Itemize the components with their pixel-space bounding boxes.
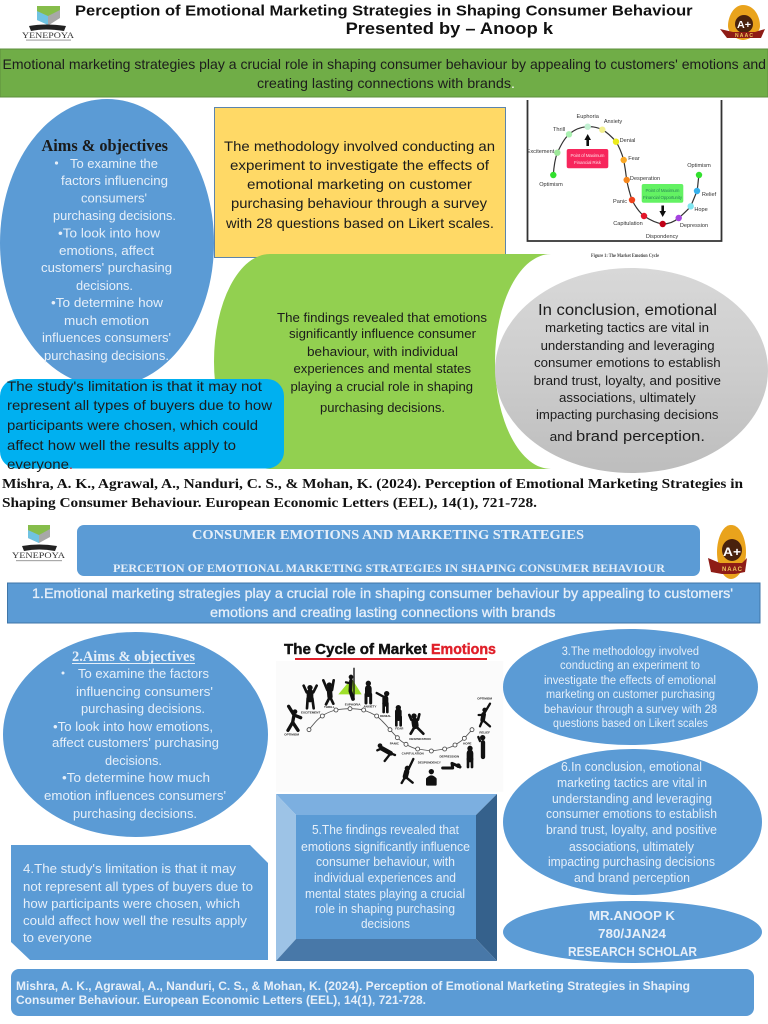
axis labels: Anxiety <box>604 119 622 125</box>
callout: maximum opportunity: Financial Opportunity <box>643 195 683 200</box>
panel: findings green shape: The findings revealed that emotions <box>277 311 487 325</box>
panel: findings bevel box: role in shaping purchasing <box>315 902 455 916</box>
text: aims list: purchasing decisions. <box>44 348 169 363</box>
panel: methodology oval: 3.The methodology involved <box>562 646 699 658</box>
panel: numbered aims oval <box>3 632 268 837</box>
axis labels: Optimism <box>539 182 563 188</box>
caption: figure caption: Figure 1: The Market Emotion Cycle <box>591 253 659 259</box>
axis labels: Hope <box>694 207 708 213</box>
citation: lower reference bar: Consumer Behaviour. European Economic Letters (EEL), 14(1), 721-728. <box>16 993 426 1007</box>
panel: conclusion grey oval: understanding and leveraging <box>541 339 715 353</box>
panel: findings green shape <box>214 254 551 469</box>
axis labels <box>527 114 717 240</box>
illustration: stick figures on emotion curve: RELIEF <box>479 730 490 734</box>
illustration: stick figures on emotion curve <box>276 661 503 792</box>
panel: findings green shape: experiences and mental states <box>294 362 471 376</box>
panel: methodology yellow box: The methodology involved conducting an <box>224 138 495 154</box>
text: aims list: emotions, affect <box>59 243 154 258</box>
citation: lower reference bar <box>11 969 754 1016</box>
badge: NAAC A+ lower <box>708 525 747 579</box>
badge: NAAC A+ lower: A+ <box>723 545 741 559</box>
panel: methodology oval: behaviour through a survey with 28 <box>544 704 717 716</box>
panel: methodology oval <box>503 629 758 745</box>
panel: conclusion grey oval: brand perception. <box>576 428 705 445</box>
panel: limitation snipped box: 4.The study's limitation is that it may <box>23 861 236 876</box>
banner: green introduction <box>0 49 768 97</box>
panel: methodology oval: questions based on Likert scales <box>553 718 708 730</box>
panel: methodology oval: marketing on customer purchasing <box>546 689 715 701</box>
header: section title bar <box>77 525 700 576</box>
text: numbered aims list: decisions. <box>105 753 162 768</box>
citation: upper reference: Mishra, A. K., Agrawal, A., Nanduri, C. S., & Mohan, K. (2024). Perception of Emotional Marketing Strategies in <box>2 477 743 492</box>
illustration: stick figures on emotion curve: ANXIETY <box>364 705 376 709</box>
banner: green introduction: . <box>511 75 515 91</box>
axis labels: Desperation <box>630 176 660 182</box>
chart: market emotion cycle figure <box>527 100 722 241</box>
panel: methodology yellow box <box>214 108 506 258</box>
panel: findings bevel box: decisions <box>361 917 410 931</box>
axis labels: Capitulation <box>613 221 643 227</box>
title: Perception of Emotional Marketing Strategies in Shaping Consumer Behaviour <box>75 2 693 20</box>
axis labels: Dispondency <box>646 234 678 240</box>
text: numbered aims list: influencing consumers' <box>76 684 213 699</box>
badge: NAAC A+ top <box>720 5 765 40</box>
illustration: stick figures on emotion curve: DEPRESSION <box>440 754 459 758</box>
text: aims list: customers' purchasing <box>41 260 172 275</box>
panel: conclusion grey oval: brand trust, loyalty, and positive <box>534 374 721 388</box>
chart: cycle of market emotions <box>276 642 503 792</box>
panel: conclusion oval: and brand perception <box>574 871 690 885</box>
panel: conclusion oval: understanding and leveraging <box>552 792 712 806</box>
panel: findings green shape: significantly influence consumer <box>289 327 476 341</box>
chart title: The Cycle of Market <box>284 642 427 658</box>
text: numbered aims list: •To look into how emotions, <box>53 719 213 734</box>
title: Presented by – Anoop k <box>346 20 554 38</box>
panel: conclusion grey oval: and <box>550 430 573 444</box>
panel: conclusion oval: consumer emotions to establish <box>546 807 717 821</box>
panel: limitation snipped box: to everyone <box>23 930 92 945</box>
panel: limitation snipped box <box>11 845 268 960</box>
badge: NAAC A+ top: A+ <box>737 20 751 31</box>
panel: limitation cyan box <box>0 378 284 472</box>
callout: maximum opportunity <box>642 184 683 217</box>
text: numbered aims list: purchasing decisions. <box>73 806 197 821</box>
panel: limitation cyan box: everyone <box>7 456 69 472</box>
axis labels: Excitement <box>527 149 555 155</box>
text: numbered aims list: •To determine how much <box>62 770 210 785</box>
illustration: stick figures on emotion curve: EUPHORIA <box>345 703 361 707</box>
illustration: stick figures on emotion curve: DESPERATION <box>409 737 431 741</box>
panel: methodology oval: investigate the effects of emotional <box>544 675 716 687</box>
text: numbered aims list: emotion influences consumers' <box>44 788 226 803</box>
logo: Yenepoya top: YENEPOYA <box>22 31 74 40</box>
panel: conclusion oval: impacting purchasing decisions <box>548 855 715 869</box>
banner: green introduction: Emotional marketing strategies play a crucial role in shaping consumer behaviour by appealing to customers' emotions and <box>2 56 766 72</box>
callout: maximum risk <box>567 134 608 168</box>
banner: blue introduction: emotions and creating lasting connections with brands <box>210 604 556 620</box>
panel: methodology yellow box: emotional marketing on customer <box>247 176 472 192</box>
badge: NAAC A+ top: NAAC <box>735 33 753 39</box>
chart title <box>284 642 496 660</box>
text: aims list: To examine the <box>70 156 158 171</box>
text: numbered aims list: affect customers' purchasing <box>52 735 219 750</box>
panel: limitation cyan box: affect how well the results apply to <box>7 437 236 453</box>
panel: limitation cyan box: represent all types of buyers due to how <box>7 397 273 413</box>
heading: numbered aims: 2.Aims & objectives <box>72 649 195 665</box>
panel: findings green shape: playing a crucial role in shaping <box>290 380 473 394</box>
callout: maximum risk: Financial Risk <box>574 160 602 165</box>
panel: conclusion grey oval: marketing tactics are vital in <box>545 321 709 335</box>
panel: findings bevel box: emotions significantly influence <box>301 840 470 854</box>
axis labels: Euphoria <box>576 114 600 120</box>
panel: conclusion oval: associations, ultimately <box>569 840 695 854</box>
panel: methodology yellow box: experiment to investigate the effects of <box>230 157 489 173</box>
text: aims list: much emotion <box>64 313 149 328</box>
text: aims list: •To determine how <box>51 295 164 310</box>
citation: upper reference: Shaping Consumer Behaviour. European Economic Letters (EEL), 14(1), 721-728. <box>2 496 537 511</box>
panel: limitation snipped box: how participants were chosen, which <box>23 896 240 911</box>
panel: methodology yellow box: purchasing behaviour through a survey <box>231 195 487 211</box>
panel: aims and objectives oval <box>0 99 214 387</box>
banner: green introduction: creating lasting connections with brands <box>257 75 511 91</box>
panel: findings green shape: purchasing decisions. <box>320 401 445 415</box>
text: numbered aims list: purchasing decisions. <box>81 701 205 716</box>
text: aims list: •To look into how <box>58 226 161 240</box>
panel: findings bevel box: mental states playing a crucial <box>305 887 465 901</box>
panel: findings bevel box <box>276 794 497 961</box>
banner: blue introduction <box>8 583 760 623</box>
citation: lower reference bar: Mishra, A. K., Agrawal, A., Nanduri, C. S., & Mohan, K. (2024). Perception of Emotional Marketing Strategies in Shaping <box>16 979 690 993</box>
panel: limitation snipped box: not represent all types of buyers due to <box>23 879 253 894</box>
illustration: stick figures on emotion curve: DENIAL <box>380 714 391 718</box>
text: aims list: influences consumers' <box>42 330 171 345</box>
panel: conclusion oval: marketing tactics are vital in <box>557 776 707 790</box>
panel: methodology oval: conducting an experiment to <box>560 660 700 672</box>
panel: presenter oval <box>503 901 762 963</box>
axis labels: Thrill <box>553 127 565 133</box>
panel: findings green shape: behaviour, with individual <box>307 345 458 359</box>
panel: methodology yellow box: with 28 questions based on Likert scales. <box>225 215 494 231</box>
axis labels: Depression <box>680 223 708 229</box>
panel: conclusion grey oval <box>495 268 768 473</box>
header: section title bar: PERCETION OF EMOTIONAL MARKETING STRATEGIES IN SHAPING CONSUMER BEHAVIOUR <box>113 561 665 575</box>
logo: Yenepoya top <box>22 6 74 41</box>
panel: limitation cyan box: The study's limitation is that it may not <box>7 378 262 394</box>
text: aims list <box>41 156 176 363</box>
panel: presenter oval: RESEARCH SCHOLAR <box>568 944 698 959</box>
axis labels: Denial <box>620 138 635 144</box>
logo: Yenepoya lower <box>12 525 66 561</box>
panel: limitation cyan box: participants were chosen, which could <box>7 417 258 433</box>
panel: findings bevel box: consumer behaviour, with <box>316 855 455 869</box>
panel: conclusion grey oval: impacting purchasing decisions <box>536 408 718 422</box>
panel: limitation cyan box: . <box>69 456 73 472</box>
badge: NAAC A+ lower: NAAC <box>722 567 743 573</box>
text: numbered aims list <box>44 666 226 821</box>
data points <box>550 124 702 227</box>
text: aims list: decisions. <box>76 278 133 293</box>
banner: blue introduction: 1.Emotional marketing strategies play a crucial role in shaping consumer behaviour by appealing to customers' <box>32 585 733 601</box>
illustration: stick figures on emotion curve: EXCITEMENT <box>301 710 320 714</box>
panel: conclusion grey oval: consumer emotions to establish <box>534 356 721 370</box>
header: section title bar: CONSUMER EMOTIONS AND MARKETING STRATEGIES <box>192 527 584 542</box>
panel: conclusion oval: brand trust, loyalty, and positive <box>546 823 717 837</box>
text: numbered aims list: To examine the factors <box>78 666 209 681</box>
axis labels: Optimism <box>687 163 711 169</box>
illustration: stick figures on emotion curve: FEAR <box>395 726 404 730</box>
illustration: stick figures on emotion curve: OPTIMISM <box>477 696 493 700</box>
logo: Yenepoya lower: YENEPOYA <box>12 550 66 560</box>
panel: conclusion grey oval: In conclusion, emotional <box>538 302 717 319</box>
citation: upper reference <box>2 477 743 511</box>
illustration: stick figures on emotion curve: CAPITULATION <box>402 752 424 756</box>
panel: findings bevel box: 5.The findings revealed that <box>312 823 459 837</box>
illustration: stick figures on emotion curve: DESPONDENCY <box>418 760 441 764</box>
panel: presenter oval: 780/JAN24 <box>598 926 667 941</box>
axis labels: Relief <box>702 192 717 198</box>
axis labels: Fear <box>628 156 640 162</box>
illustration: stick figures on emotion curve: THRILL <box>324 705 335 709</box>
callout: maximum opportunity: Point of Maximum <box>646 188 680 193</box>
panel: findings bevel box: individual experiences and <box>314 871 456 885</box>
panel: presenter oval: MR.ANOOP K <box>589 908 676 923</box>
heading: aims: Aims & objectives <box>42 136 169 155</box>
text: aims list: factors influencing <box>61 173 168 188</box>
axis labels: Panic <box>613 199 627 205</box>
chart title: Emotions <box>431 642 496 658</box>
text: aims list: consumers' <box>81 190 147 206</box>
title <box>75 2 693 38</box>
illustration: stick figures on emotion curve: OPTIMISM <box>284 733 300 737</box>
panel: limitation snipped box: could affect how well the results apply <box>23 913 248 928</box>
panel: conclusion grey oval: associations, ultimately <box>559 391 696 405</box>
illustration: stick figures on emotion curve: PANIC <box>390 741 400 745</box>
text: aims list: purchasing decisions. <box>53 208 176 223</box>
callout: maximum risk: Point of Maximum <box>570 153 605 158</box>
illustration: stick figures on emotion curve: HOPE <box>463 742 472 746</box>
panel: conclusion oval <box>503 749 762 895</box>
panel: conclusion oval: 6.In conclusion, emotional <box>561 760 702 774</box>
